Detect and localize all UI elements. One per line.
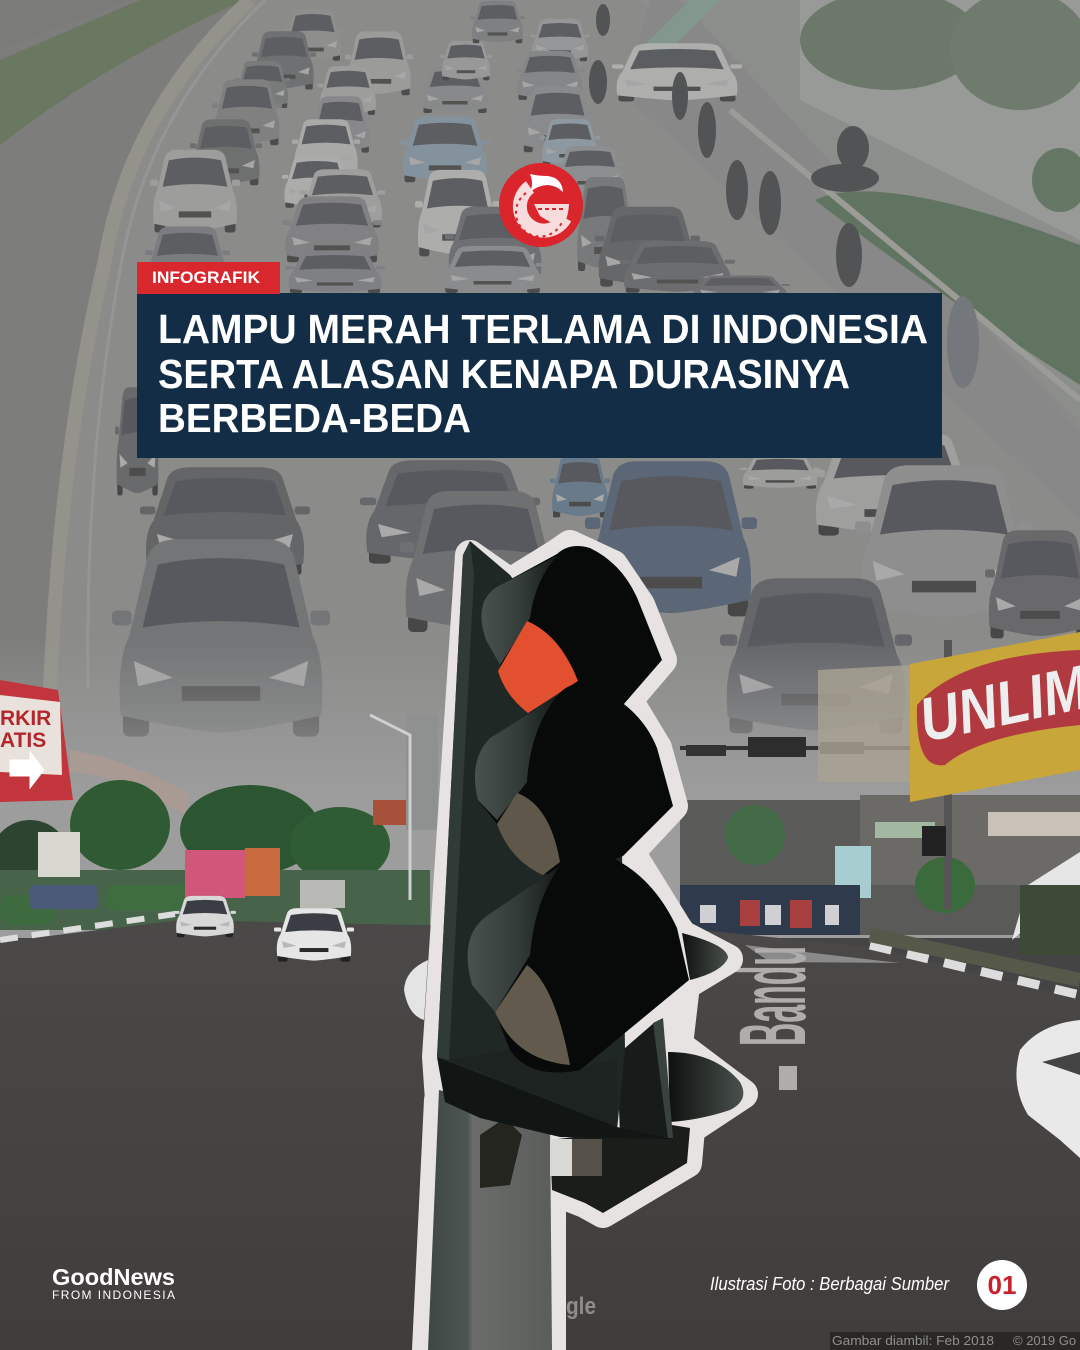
traffic light <box>427 541 743 1350</box>
plate underside <box>437 1057 673 1139</box>
lower plate face <box>449 1050 617 1127</box>
top hood side <box>481 556 557 665</box>
logo: red circle emblem <box>499 163 583 247</box>
traffic light white outline <box>427 545 743 1350</box>
background photo: congested road <box>0 0 1080 830</box>
middle unlit lens <box>497 793 560 875</box>
middle signal hood <box>475 684 673 880</box>
haze over the traffic photo <box>0 0 1080 800</box>
white cars on the street <box>174 896 1080 1158</box>
red lamp <box>498 621 578 713</box>
infografik tag: INFOGRAFIK <box>152 268 261 287</box>
bottom unlit lens <box>495 965 570 1065</box>
bottom signal hood <box>468 852 689 1072</box>
brand: GoodNews from Indonesia <box>52 1264 175 1302</box>
title banner: SERTA ALASAN KENAPA DURASINYA <box>158 351 850 397</box>
title banner <box>137 293 942 458</box>
image capture caption: Gambar diambil: Feb 2018 <box>832 1333 994 1348</box>
text: Bandu <box>720 946 826 1046</box>
page number badge: 01 <box>988 1270 1016 1300</box>
road marking dash <box>779 1066 797 1090</box>
billboard: left red sign: ATIS <box>0 729 46 752</box>
cars near in the traffic jam <box>112 387 1080 737</box>
rear signal hoods <box>668 933 743 1122</box>
middle hood side <box>475 696 557 820</box>
bottom hood side <box>468 866 560 1012</box>
haze fade between photos <box>0 640 1080 800</box>
page number badge <box>977 1260 1027 1310</box>
cars far in the traffic jam <box>145 1 790 299</box>
brand: GoodNews from Indonesia: GoodNews <box>52 1264 175 1290</box>
signal back plate <box>437 541 625 1130</box>
title banner: BERBEDA-BEDA <box>158 395 471 441</box>
motorcycles on the side lane <box>589 4 979 388</box>
lower photo: street scene <box>0 640 1080 955</box>
top signal hood <box>481 546 662 705</box>
rear housing and bracket <box>480 1018 690 1213</box>
image capture caption <box>830 1332 1080 1350</box>
billboard: right yellow sign <box>818 632 1080 802</box>
image capture caption: © 2019 Go <box>1013 1333 1076 1348</box>
traffic light pole <box>428 1090 552 1350</box>
title banner: LAMPU MERAH TERLAMA DI INDONESIA <box>158 306 928 352</box>
road surface <box>0 920 1080 1350</box>
billboard: left red sign: RKIR <box>0 707 51 730</box>
brand: GoodNews from Indonesia: FROM INDONESIA <box>52 1288 175 1302</box>
curb stripes <box>0 914 1080 995</box>
google watermark: gle <box>566 1293 596 1320</box>
plate side edge <box>437 541 474 1060</box>
photo credit: Ilustrasi Foto : Berbagai Sumber <box>710 1274 950 1294</box>
infografik tag <box>137 262 280 294</box>
billboard: left red sign <box>0 680 73 802</box>
